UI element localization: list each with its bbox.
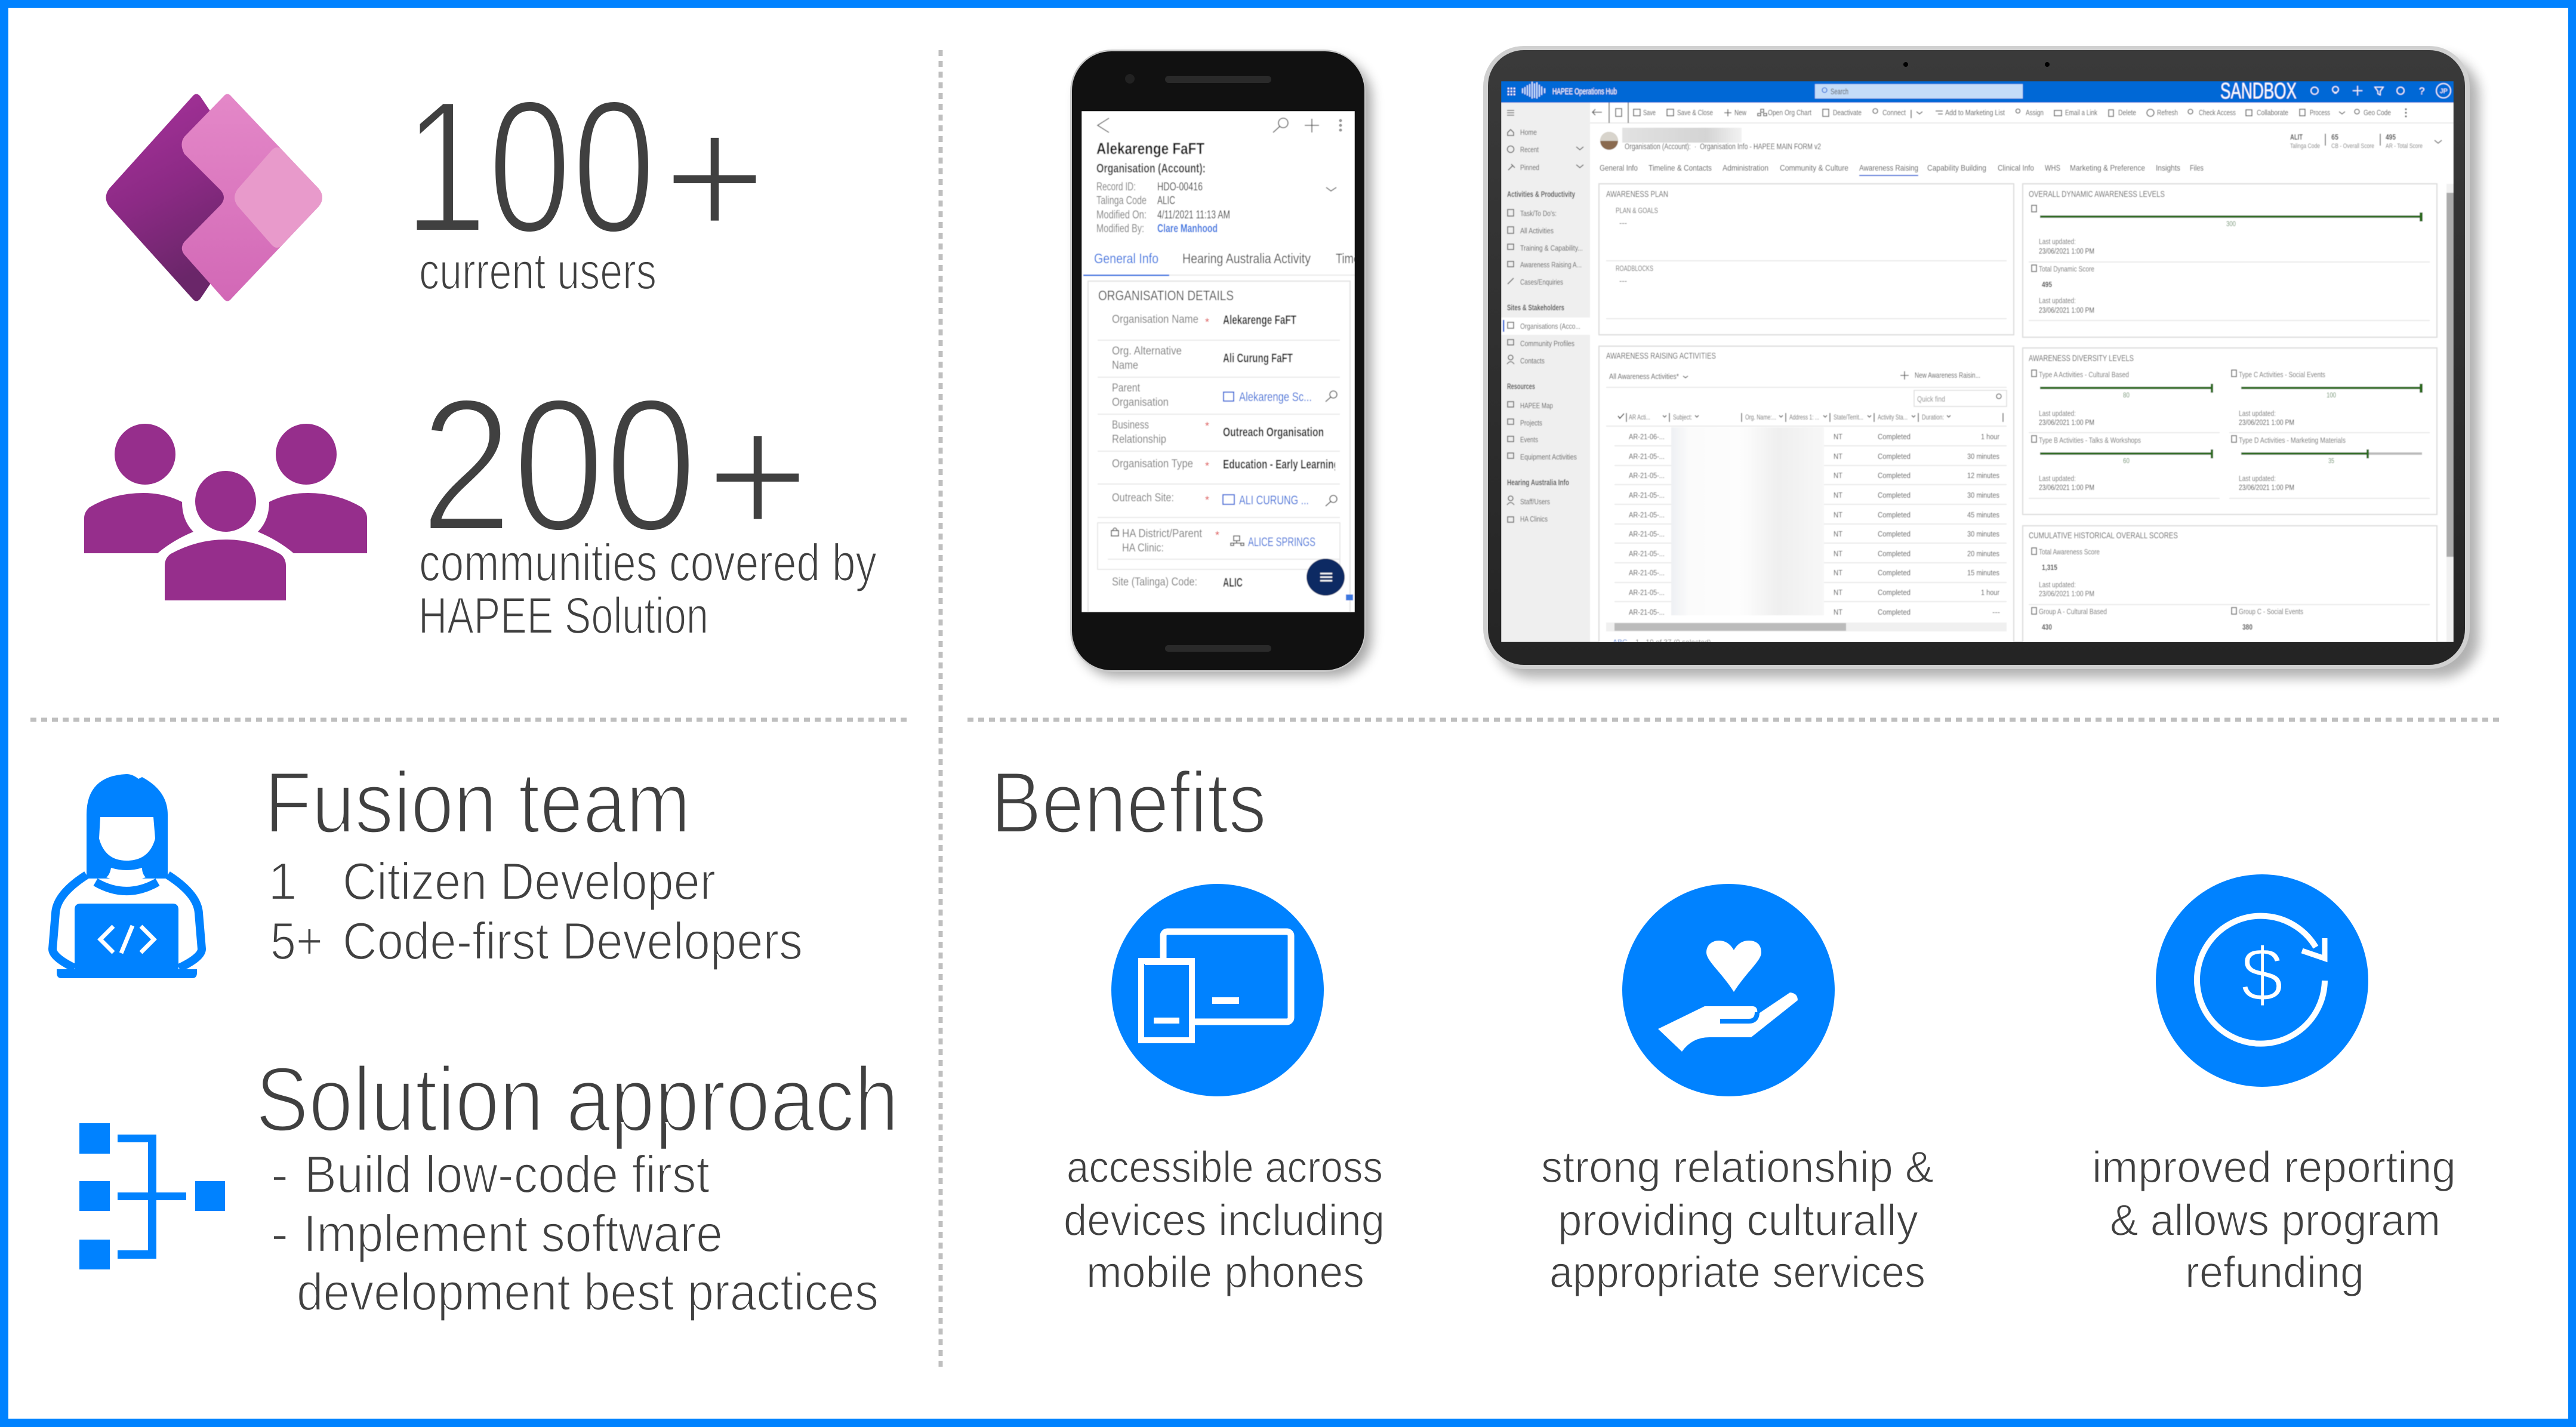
gauge: type D (2229, 436, 2430, 498)
stat: 200+ communities: + (705, 375, 810, 575)
app header bar: JP (2440, 88, 2448, 95)
record title area: ALIT (2290, 132, 2303, 141)
gauge: type A: Last updated: (2039, 409, 2076, 418)
left navigation: Resources (1507, 382, 1535, 391)
panel: cumulative historical overall scores: Last updated: (2039, 580, 2076, 589)
phone organisation details panel: ALI CURUNG ... (1239, 494, 1309, 507)
panel: awareness raising activities table: AR-21-05-... (1629, 608, 1665, 617)
icon: tablet and phone (1111, 884, 1324, 1096)
left navigation: Community Profiles (1520, 339, 1574, 348)
stat: 200+ communities: 200 (420, 359, 697, 571)
phone body (1070, 50, 1366, 672)
stat: 200+ communities: HAPEE Solution (418, 587, 708, 645)
app header bar: Search (1831, 87, 1848, 96)
panel: awareness raising activities table: Completed (1878, 510, 1911, 519)
phone record summary (1096, 140, 1230, 235)
left navigation: Contacts (1520, 356, 1545, 365)
panel: overall dynamic awareness levels (2023, 184, 2437, 337)
panel: awareness raising activities table: AR-21-05-... (1629, 588, 1665, 597)
command bar: Process (2310, 108, 2330, 117)
panel: overall dynamic awareness levels: Last updated: (2039, 237, 2076, 246)
left navigation: Cases/Enquiries (1520, 278, 1563, 286)
heading and list: Solution approach: Implement software (303, 1204, 723, 1263)
panel: awareness plan: PLAN & GOALS (1616, 206, 1658, 215)
panel: awareness raising activities table: 45 minutes (1967, 510, 1999, 519)
phone organisation details panel: Ali Curung FaFT (1223, 352, 1293, 365)
phone organisation details panel: Relationship (1112, 433, 1166, 446)
panel: cumulative historical overall scores: 430 (2042, 622, 2052, 631)
text: improved reporting: improved reporting (2092, 1142, 2456, 1192)
panel: awareness plan: --- (1619, 218, 1627, 227)
text: improved reporting: refunding (2185, 1247, 2364, 1297)
panel: awareness raising activities table: 30 minutes (1967, 491, 1999, 500)
panel: overall dynamic awareness levels: 495 (2042, 280, 2052, 289)
gauge: type A: Type A Activities - Cultural Based (2039, 370, 2129, 379)
heading and list: Solution approach: - (271, 1145, 288, 1204)
gauge: type B: Last updated: (2039, 474, 2076, 483)
panel: awareness raising activities table: Completed (1878, 608, 1911, 617)
panel: awareness raising activities table: NT (1834, 549, 1842, 558)
phone record summary: Talinga Code (1096, 195, 1147, 207)
form tabs: Community & Culture (1780, 164, 1848, 172)
left navigation (1501, 103, 1590, 642)
phone organisation details panel: Org. Alternative (1112, 345, 1182, 357)
icon: heart over hand (1622, 884, 1835, 1096)
left navigation: Home (1520, 128, 1537, 137)
command bar: Geo Code (2364, 108, 2391, 117)
panel: awareness raising activities table: Duration: (1922, 413, 1944, 421)
panel: awareness raising activities table: Completed (1878, 549, 1911, 558)
phone shadow (1078, 58, 1372, 677)
gauge: type D: Type D Activities - Marketing Materials (2239, 436, 2346, 445)
panel: awareness raising activities table: NT (1834, 491, 1842, 500)
phone record summary: HDO-00416 (1157, 181, 1203, 193)
panel: awareness raising activities table: NT (1834, 608, 1842, 617)
benefit: improved reporting (2092, 874, 2456, 1297)
panel: awareness raising activities table: AR-21-05-... (1629, 549, 1665, 558)
gauge: type A: 23/06/2021 1:00 PM (2039, 418, 2094, 427)
gauge: type A (2029, 370, 2220, 433)
stat: 100+ current users: 100 (403, 61, 656, 273)
phone tabs: Time (1336, 251, 1360, 266)
phone organisation details panel: Parent (1112, 382, 1141, 394)
panel: awareness plan: --- (1619, 276, 1627, 285)
panel: awareness raising activities table: ABC (1613, 638, 1628, 646)
record title area (1600, 128, 2442, 151)
text: strong relationship: appropriate services (1549, 1247, 1925, 1297)
form tabs: Files (2190, 164, 2204, 172)
left navigation: Events (1520, 435, 1538, 444)
left navigation: Projects (1520, 418, 1542, 427)
record title area: CB - Overall Score (2331, 143, 2374, 150)
phone organisation details panel: * (1205, 460, 1209, 472)
panel: awareness raising activities table: Address 1: ... (1789, 413, 1819, 421)
gauge: type B (2029, 436, 2220, 498)
panel: overall dynamic awareness levels: OVERALL DYNAMIC AWARENESS LEVELS (2029, 189, 2165, 199)
tablet mockup (1483, 46, 2479, 678)
panel: awareness plan (1599, 184, 2014, 335)
command bar: Email a Link (2065, 108, 2097, 117)
left navigation: Activities & Productivity (1507, 190, 1575, 199)
left navigation: HA Clinics (1520, 514, 1548, 523)
panel: awareness raising activities table: Completed (1878, 529, 1911, 538)
phone organisation details panel: Business (1112, 419, 1149, 432)
text: accessible across devices (1064, 1142, 1385, 1297)
panel: awareness raising activities table (1599, 346, 2014, 657)
form tabs: Administration (1723, 164, 1768, 172)
phone organisation details panel: Outreach Organisation (1223, 426, 1324, 439)
phone organisation details panel: Education - Early Learning (1223, 458, 1339, 471)
phone record summary: Organisation (Account): (1096, 162, 1206, 175)
form tabs: Capability Building (1927, 164, 1986, 172)
record title area: 495 (2386, 132, 2396, 141)
heading and list: Solution approach: development best practices (297, 1262, 879, 1321)
panel: cumulative historical overall scores: 380 (2242, 622, 2253, 631)
phone organisation details panel (1088, 281, 1350, 615)
phone organisation details panel: Alekarenge Sc... (1239, 390, 1312, 404)
gauge: type B: 60 (2123, 458, 2130, 465)
gauge: type C: 100 (2327, 392, 2336, 399)
panel: awareness raising activities table: NT (1834, 432, 1842, 441)
panel: overall dynamic awareness levels: Total Dynamic Score (2039, 264, 2094, 273)
phone organisation details panel: HA District/Parent (1122, 528, 1203, 540)
command bar: Collaborate (2257, 108, 2288, 117)
phone organisation details panel: * (1205, 420, 1209, 432)
panel: cumulative historical overall scores: 1,315 (2042, 563, 2057, 572)
phone organisation details panel: Alekarenge FaFT (1223, 313, 1296, 327)
phone organisation details panel: * (1205, 494, 1209, 506)
gauge: type A: 80 (2123, 392, 2130, 399)
phone record summary: 4/11/2021 11:13 AM (1157, 209, 1230, 221)
gauge: type C: Last updated: (2239, 409, 2276, 418)
record title area: AR - Total Score (2386, 143, 2423, 150)
left navigation: Hearing Australia Info (1507, 478, 1569, 487)
panel: awareness raising activities table: AR-21-05-... (1629, 491, 1665, 500)
phone organisation details panel: * (1205, 316, 1209, 328)
command bar: Delete (2118, 108, 2136, 117)
text: accessible across devices: devices including (1064, 1195, 1385, 1245)
panel: awareness raising activities table: AWARENESS RAISING ACTIVITIES (1606, 351, 1716, 361)
command bar: Add to Marketing List (1945, 108, 2005, 117)
text: accessible across devices: mobile phones (1086, 1247, 1364, 1297)
panel: awareness raising activities table: State/Territ... (1834, 413, 1863, 421)
panel: awareness raising activities table: Completed (1878, 471, 1911, 480)
app header bar (1501, 81, 2454, 103)
panel: overall dynamic awareness levels: 300 (2226, 221, 2236, 228)
phone record summary: ALIC (1157, 195, 1175, 207)
form tabs: Timeline & Contacts (1648, 164, 1712, 172)
phone record summary: Clare Manhood (1157, 223, 1218, 235)
phone organisation details panel: Name (1112, 359, 1138, 372)
panel: awareness raising activities table: 1 hour (1981, 432, 2000, 441)
panel: awareness raising activities table: NT (1834, 529, 1842, 538)
phone organisation details panel: HA Clinic: (1122, 542, 1164, 554)
panel: awareness raising activities table: NT (1834, 471, 1842, 480)
phone record summary: Record ID: (1096, 181, 1136, 193)
panel: awareness diversity levels: AWARENESS DIVERSITY LEVELS (2029, 353, 2134, 363)
panel: cumulative historical overall scores: Group A - Cultural Based (2039, 607, 2107, 616)
tablet shadow (1493, 56, 2479, 678)
heading: Benefits: Benefits (991, 754, 1267, 851)
app header bar: ? (2419, 85, 2424, 97)
panel: awareness raising activities table: 20 minutes (1967, 549, 1999, 558)
gauge: type C: Type C Activities - Social Events (2239, 370, 2325, 379)
text: strong relationship (1541, 1142, 1934, 1297)
heading and list: Solution approach: - (271, 1204, 288, 1263)
phone organisation details panel: ORGANISATION DETAILS (1098, 288, 1234, 303)
command bar: Connect (1882, 108, 1906, 117)
left navigation: Recent (1520, 145, 1539, 154)
panel: awareness diversity levels (2023, 348, 2437, 514)
heading and list: Fusion team: Citizen Developer (343, 852, 716, 911)
phone organisation details panel: Site (Talinga) Code: (1112, 576, 1197, 588)
left navigation: Task/To Do's: (1520, 209, 1557, 218)
phone organisation details panel: * (1215, 529, 1219, 541)
panel: overall dynamic awareness levels: Last updated: (2039, 296, 2076, 305)
panel: awareness raising activities table: New Awareness Raisin... (1915, 371, 1980, 380)
record title area: Talinga Code (2290, 143, 2320, 150)
panel: awareness raising activities table: Subject: (1673, 413, 1692, 421)
panel: awareness raising activities table: Completed (1878, 568, 1911, 577)
command bar: Refresh (2157, 108, 2178, 117)
heading and list: Fusion team: Fusion team (264, 754, 691, 851)
heading and list: Fusion team: 5+ (270, 911, 323, 970)
left navigation: Staff/Users (1520, 497, 1550, 506)
heading and list: Fusion team: 1 (268, 852, 297, 911)
panel: awareness raising activities table: Completed (1878, 432, 1911, 441)
phone screen (1081, 111, 1360, 615)
panel: awareness raising activities table: AR-21-05-... (1629, 452, 1665, 461)
gauge: type D: 35 (2328, 458, 2334, 465)
panel: awareness raising activities table: AR Acti... (1629, 413, 1650, 421)
phone record summary: Alekarenge FaFT (1096, 140, 1204, 158)
panel: awareness raising activities table: 30 minutes (1967, 452, 1999, 461)
icon: dollar refresh (2156, 874, 2368, 1087)
command bar: Deactivate (1833, 108, 1862, 117)
panel: awareness raising activities table: 15 minutes (1967, 568, 1999, 577)
phone tabs: Hearing Australia Activity (1182, 251, 1311, 266)
phone tabs (1083, 251, 1360, 276)
text: accessible across devices: accessible across (1067, 1142, 1383, 1192)
panel: awareness raising activities table: All Awareness Activities* (1609, 372, 1679, 381)
panel: awareness raising activities table: Org. Name:... (1745, 413, 1776, 421)
stat: 200+ communities (418, 359, 877, 645)
panel: awareness plan: AWARENESS PLAN (1606, 189, 1668, 199)
icon: process tree (79, 1123, 225, 1269)
heading and list: Solution approach (255, 1048, 899, 1321)
command bar (1590, 103, 2454, 123)
gauge: type D: Last updated: (2239, 474, 2276, 483)
left navigation: HAPEE Map (1520, 401, 1553, 410)
gauge: type C (2229, 370, 2430, 433)
left navigation: All Activities (1520, 226, 1554, 235)
form tabs: Insights (2156, 164, 2180, 172)
tablet screen (1501, 79, 2454, 657)
heading and list: Fusion team: Code-first Developers (343, 911, 803, 970)
panel: awareness raising activities table: Completed (1878, 588, 1911, 597)
icon: three people (84, 424, 367, 600)
icon: dollar refresh: $ (2241, 932, 2284, 1018)
panel: cumulative historical overall scores (2023, 526, 2437, 657)
benefit: strong relationship (1541, 884, 1934, 1297)
panel: awareness raising activities table: NT (1834, 452, 1842, 461)
left navigation: Equipment Activities (1520, 452, 1577, 461)
left navigation: Sites & Stakeholders (1507, 303, 1564, 312)
stat: 200+ communities: communities covered by (419, 533, 877, 592)
panel: awareness raising activities table: AR-21-05-... (1629, 510, 1665, 519)
panel: awareness raising activities table: NT (1834, 588, 1842, 597)
stat: 100+ current users: current users (419, 243, 657, 300)
panel: overall dynamic awareness levels: 23/06/2021 1:00 PM (2039, 246, 2094, 255)
form tabs: Awareness Raising (1859, 164, 1918, 172)
heading and list: Solution approach: Solution approach (255, 1048, 899, 1151)
phone mockup (1070, 50, 1372, 677)
phone organisation details panel: Organisation Type (1112, 458, 1193, 470)
icon: developer at laptop (53, 774, 202, 978)
panel: awareness raising activities table: NT (1834, 510, 1842, 519)
panel: cumulative historical overall scores: 23/06/2021 1:00 PM (2039, 589, 2094, 598)
panel: awareness raising activities table: AR-21-06-... (1629, 432, 1665, 441)
record title area: 65 (2331, 132, 2338, 141)
form tabs: WHS (2045, 164, 2060, 172)
form tabs: Marketing & Preference (2070, 164, 2145, 172)
record title area: Organisation (Account): · Organisation Info - HAPEE MAIN FORM v2 (1625, 142, 1821, 151)
command bar: Open Org Chart (1768, 108, 1811, 117)
panel: cumulative historical overall scores: Total Awareness Score (2039, 547, 2100, 556)
panel: cumulative historical overall scores: Group C - Social Events (2239, 607, 2303, 616)
phone floating action button (1307, 559, 1345, 596)
left navigation: Organisations (Acco... (1520, 322, 1580, 331)
form tabs: General Info (1600, 164, 1638, 172)
phone tabs: General Info (1094, 251, 1158, 266)
stat: 100+ current users: + (663, 76, 767, 277)
icon: Power Apps diamond logo (106, 94, 322, 301)
command bar: Assign (2026, 108, 2044, 117)
panel: awareness raising activities table: 30 minutes (1967, 529, 1999, 538)
left navigation: Awareness Raising A... (1520, 260, 1582, 269)
gauge: type B: 23/06/2021 1:00 PM (2039, 483, 2094, 492)
command bar: Check Access (2199, 108, 2236, 117)
panel: awareness raising activities table: Completed (1878, 452, 1911, 461)
form tabs (1600, 164, 2204, 176)
panel: awareness raising activities table: AR-21-05-... (1629, 568, 1665, 577)
panel: cumulative historical overall scores: CUMULATIVE HISTORICAL OVERALL SCORES (2029, 531, 2178, 541)
app header bar: SANDBOX (2220, 79, 2297, 104)
phone record summary: Modified By: (1096, 223, 1144, 235)
vertical scrollbar (2446, 184, 2454, 642)
text: improved reporting (2092, 1142, 2456, 1297)
panel: awareness raising activities table: 1 hour (1981, 588, 2000, 597)
heading and list: Solution approach: Build low-code first (304, 1145, 710, 1204)
app header bar: HAPEE Operations Hub (1552, 87, 1617, 97)
text: improved reporting: & allows program (2110, 1195, 2441, 1245)
left navigation: Pinned (1520, 163, 1539, 172)
command bar: New (1734, 108, 1746, 117)
gauge: type B: Type B Activities - Talks & Workshops (2039, 436, 2141, 445)
tablet body (1483, 46, 2470, 669)
phone organisation details panel: ALICE SPRINGS (1248, 535, 1315, 549)
command bar: Save & Close (1677, 108, 1713, 117)
command bar: Save (1643, 108, 1656, 117)
text: strong relationship: strong relationship & (1541, 1142, 1934, 1192)
panel: awareness raising activities table: NT (1834, 568, 1842, 577)
heading and list: Fusion team (264, 754, 803, 970)
panel: awareness raising activities table: Completed (1878, 491, 1911, 500)
benefit: accessible across devices (1064, 884, 1385, 1297)
panel: awareness raising activities table: --- (1992, 608, 2000, 617)
panel: awareness plan: ROADBLOCKS (1616, 264, 1653, 273)
panel: awareness raising activities table: 12 minutes (1967, 471, 1999, 480)
panel: awareness raising activities table: AR-21-05-... (1629, 529, 1665, 538)
panel: awareness raising activities table: Activity Sta... (1878, 413, 1908, 421)
phone record summary: Modified On: (1096, 209, 1147, 221)
gauge: type C: 23/06/2021 1:00 PM (2239, 418, 2294, 427)
panel: awareness raising activities table: Quick find (1917, 394, 1945, 403)
form tabs: Clinical Info (1998, 164, 2034, 172)
panel: awareness raising activities table: AR-21-05-... (1629, 471, 1665, 480)
phone organisation details panel: Organisation (1112, 396, 1169, 409)
gauge: type D: 23/06/2021 1:00 PM (2239, 483, 2294, 492)
panel: awareness raising activities table: 1 - 10 of 37 (0 selected) (1635, 638, 1711, 646)
text: strong relationship: providing culturally (1558, 1195, 1918, 1245)
phone organisation details panel: Outreach Site: (1112, 492, 1174, 504)
phone organisation details panel: ALIC (1223, 576, 1243, 590)
phone header icons (1098, 118, 1342, 191)
left navigation: Training & Capability... (1520, 244, 1583, 252)
panel: overall dynamic awareness levels: 23/06/2021 1:00 PM (2039, 306, 2094, 315)
phone organisation details panel: Organisation Name (1112, 313, 1198, 326)
